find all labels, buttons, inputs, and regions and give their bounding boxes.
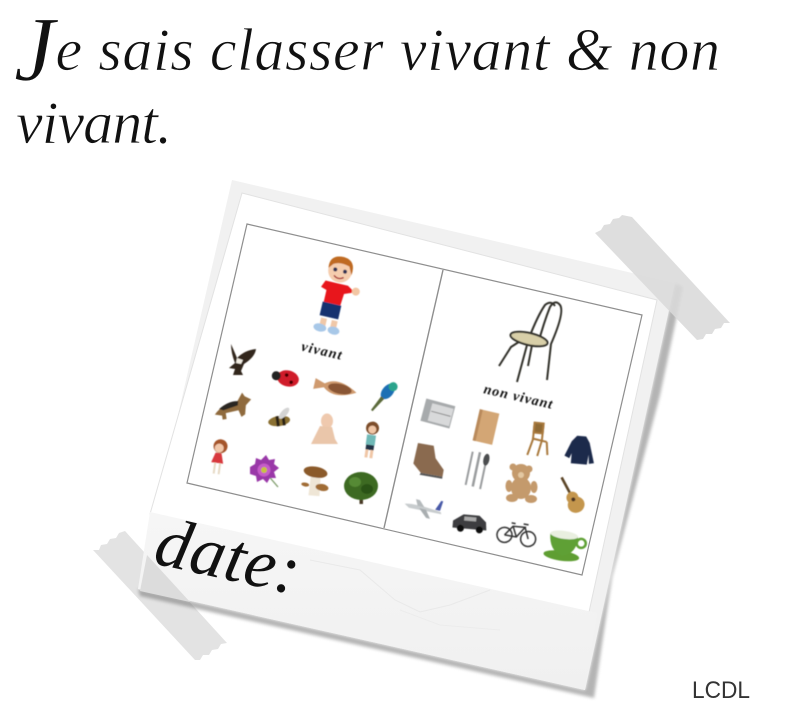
icon: teddy bear xyxy=(506,464,538,503)
title: e sais classer vivant & non xyxy=(55,17,720,83)
icon: boy xyxy=(311,254,367,338)
icon: wooden chair xyxy=(527,422,551,457)
polaroid frame xyxy=(138,180,683,698)
icon: bentwood chair xyxy=(499,302,561,382)
panel: vivant xyxy=(210,254,399,504)
paper band with texture xyxy=(138,512,597,690)
tape: bottom left, behind photo xyxy=(93,531,227,660)
icon: jacket xyxy=(564,435,596,465)
icon: small boy xyxy=(362,421,380,459)
title: vivant. xyxy=(16,90,172,156)
panel: non vivant xyxy=(403,302,596,564)
label: vivant: vivant xyxy=(300,340,344,364)
icon: eagle xyxy=(229,344,256,375)
icon: mushroom xyxy=(300,465,332,498)
icon: girl xyxy=(210,438,228,475)
icon: fish xyxy=(313,377,358,399)
icon: plane xyxy=(403,493,444,521)
icon: bee xyxy=(266,405,293,427)
icon: parrot xyxy=(368,379,399,414)
icon: ladybug xyxy=(270,367,300,389)
title: J xyxy=(14,0,59,100)
worksheet xyxy=(187,224,642,575)
icon: dog xyxy=(212,391,253,421)
icon: cutlery xyxy=(464,451,491,490)
icon: baby xyxy=(311,414,338,444)
credit: LCDL xyxy=(692,677,750,704)
label: non vivant: non vivant xyxy=(482,382,555,413)
icon: green cup xyxy=(543,528,587,564)
icon: filing cabinet xyxy=(420,398,455,428)
icon: bicycle xyxy=(496,520,538,548)
inner photo area xyxy=(150,193,657,612)
icon: guitar xyxy=(554,473,587,516)
icon: cupboard xyxy=(473,409,499,445)
tape: top right xyxy=(595,215,730,340)
icon: boot xyxy=(412,443,448,479)
tape: bottom left overlap on photo xyxy=(140,555,190,602)
title xyxy=(14,0,720,156)
icon: car xyxy=(452,514,488,534)
outer frame xyxy=(138,180,675,690)
photo shadow xyxy=(138,283,683,698)
icon: flower xyxy=(250,455,279,487)
date label: date: xyxy=(149,503,308,610)
icon: tree xyxy=(344,472,378,504)
